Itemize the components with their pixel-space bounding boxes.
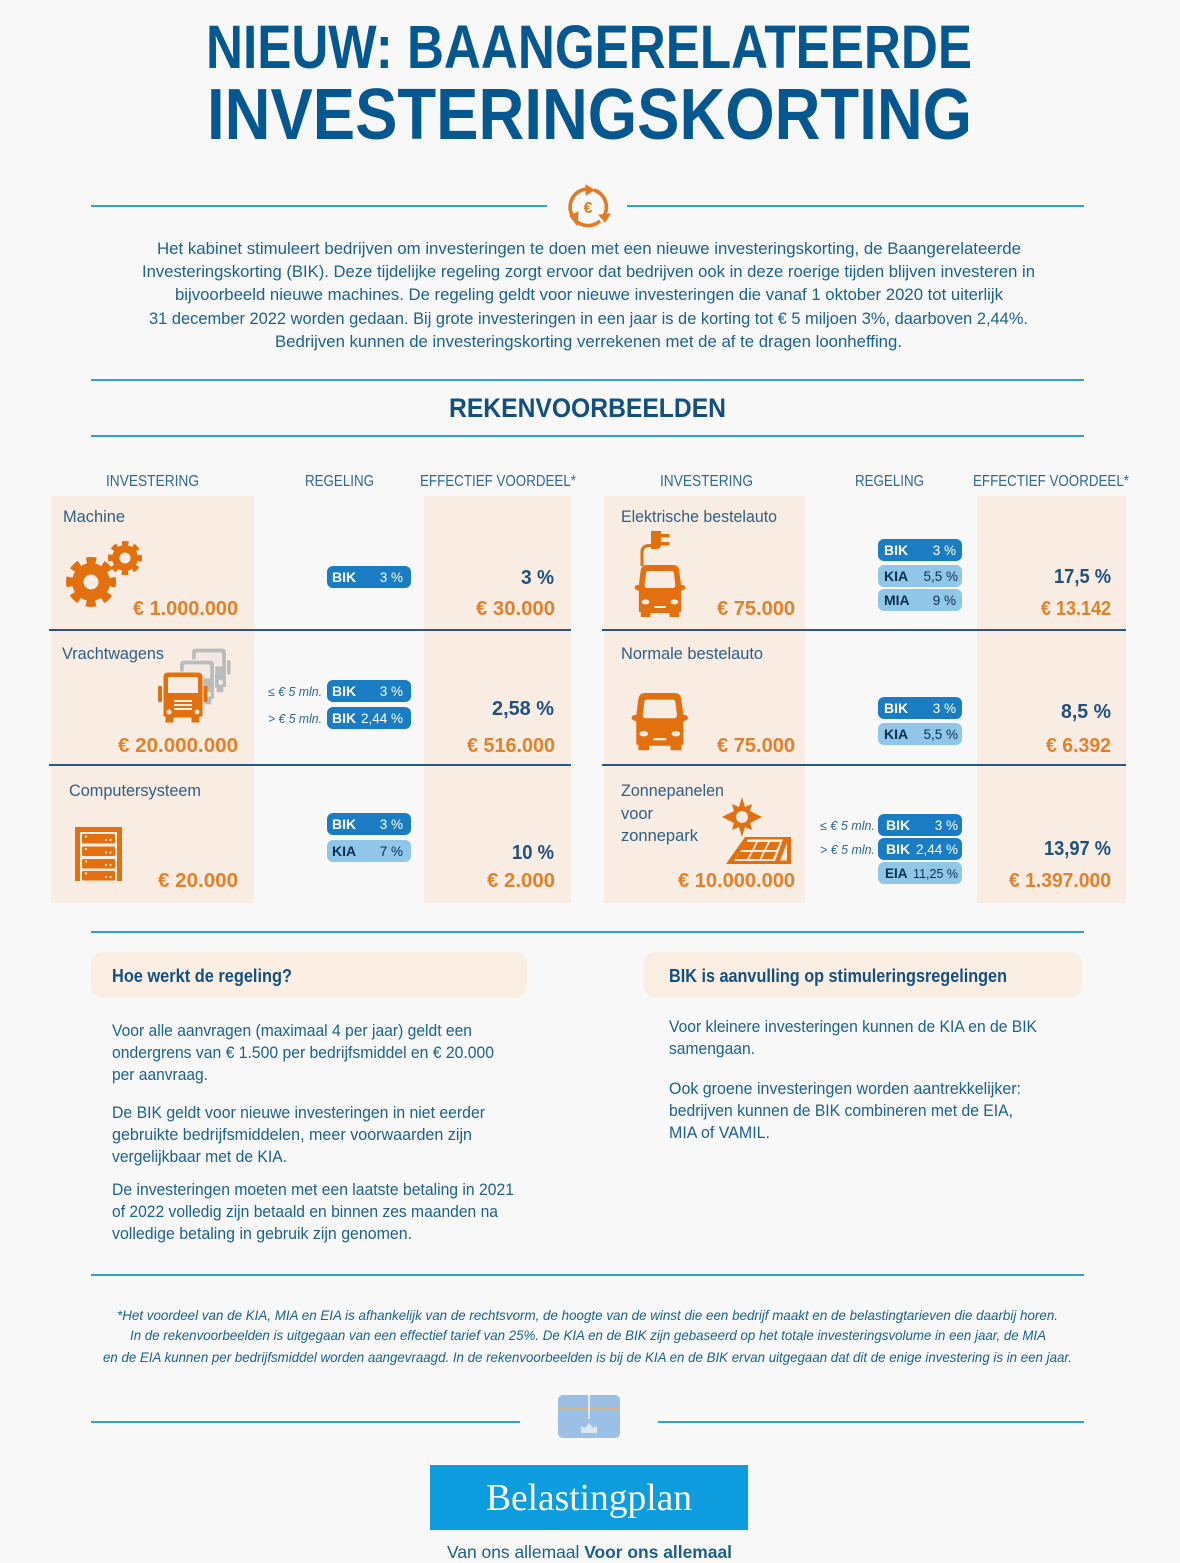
row: elektrische bestelauto: 9 %: [933, 593, 956, 608]
row: elektrische bestelauto: 5,5 %: [923, 569, 958, 584]
tagline: Van ons allemaal Voor ons allemaal: [447, 1542, 732, 1562]
title: INVESTERINGSKORTING: [207, 74, 972, 155]
row: zonnepanelen: 13,97 %: [1044, 838, 1111, 860]
footnote: en de EIA kunnen per bedrijfsmiddel worden aangevraagd. In de rekenvoorbeelden is bij de KIA en de BIK ervan uitgegaan dat dit de enige investering is in een jaar.: [103, 1349, 1072, 1365]
row: elektrische bestelauto: € 75.000: [717, 598, 795, 620]
row: vrachtwagens: € 516.000: [467, 735, 555, 757]
row: normale bestelauto: € 75.000: [717, 735, 795, 757]
row: computersysteem: 10 %: [512, 842, 554, 864]
row: computersysteem: Computersysteem: [69, 782, 201, 800]
row: zonnepanelen: EIA: [885, 866, 908, 881]
row: vrachtwagens: BIK: [332, 683, 356, 699]
row: vrachtwagens: 3 %: [380, 684, 403, 699]
row: vrachtwagens: ≤ € 5 mln.: [268, 685, 322, 699]
panel: hoe werkt de regeling: vergelijkbaar met de KIA.: [112, 1147, 287, 1166]
panel: hoe werkt de regeling: Voor alle aanvragen (maximaal 4 per jaar) geldt een: [112, 1021, 472, 1040]
row: elektrische bestelauto: Elektrische bestelauto: [621, 508, 777, 526]
row: zonnepanelen: [621, 782, 1111, 892]
intro paragraph: [142, 239, 1035, 351]
panel: bik is aanvulling: [644, 952, 1082, 1142]
row: normale bestelauto: 5,5 %: [923, 727, 958, 742]
row: computersysteem: 7 %: [380, 844, 403, 859]
title: [206, 13, 972, 155]
table column backgrounds: [51, 496, 1126, 903]
row: vrachtwagens: BIK: [332, 710, 356, 726]
icon: van: [632, 693, 688, 750]
row: normale bestelauto: BIK: [884, 700, 908, 716]
row: normale bestelauto: [621, 645, 1111, 757]
row: zonnepanelen: € 1.397.000: [1009, 870, 1111, 892]
row: machine: [63, 508, 555, 620]
intro paragraph: 31 december 2022 worden gedaan. Bij grote investeringen in een jaar is de korting tot € 5 miljoen 3%, daarboven 2,44%.: [149, 309, 1028, 328]
row: zonnepanelen: ≤ € 5 mln.: [820, 819, 875, 833]
intro paragraph: Het kabinet stimuleert bedrijven om investeringen te doen met een nieuwe investeringskorting, de Baangerelateerde: [157, 239, 1021, 258]
table column headers: REGELING: [305, 473, 374, 490]
row: elektrische bestelauto: 3 %: [933, 543, 956, 558]
row: machine: € 1.000.000: [133, 598, 238, 620]
intro paragraph: Investeringskorting (BIK). Deze tijdelijke regeling zorgt ervoor dat bedrijven ook in deze roerige tijden blijven investeren in: [142, 262, 1035, 281]
table column headers: REGELING: [855, 473, 924, 490]
row: computersysteem: BIK: [332, 816, 356, 832]
panel: hoe werkt de regeling: De BIK geldt voor nieuwe investeringen in niet eerder: [112, 1103, 485, 1122]
logo box: belastingplan: Belastingplan: [486, 1477, 692, 1519]
panel: bik is aanvulling: BIK is aanvulling op stimuleringsregelingen: [669, 966, 1007, 986]
row: elektrische bestelauto: € 13.142: [1041, 598, 1111, 620]
panel: hoe werkt de regeling: volledige betaling in gebruik zijn genomen.: [112, 1224, 412, 1243]
row: vrachtwagens: > € 5 mln.: [268, 712, 322, 726]
icon: electric van with plug: [635, 531, 685, 617]
row: vrachtwagens: 2,44 %: [361, 711, 403, 726]
row: computersysteem: [69, 782, 555, 892]
panel: hoe werkt de regeling: [91, 952, 527, 1243]
footnote: [103, 1307, 1072, 1365]
icon: server rack: [75, 827, 122, 881]
panel: bik is aanvulling: samengaan.: [669, 1039, 755, 1058]
row: elektrische bestelauto: BIK: [884, 542, 908, 558]
row: normale bestelauto: 8,5 %: [1061, 701, 1111, 723]
intro paragraph: Bedrijven kunnen de investeringskorting verrekenen met de af te dragen loonheffing.: [275, 332, 902, 351]
panel: hoe werkt de regeling: per aanvraag.: [112, 1065, 208, 1084]
heading: rekenvoorbeelden: REKENVOORBEELDEN: [449, 393, 726, 423]
row: elektrische bestelauto: 17,5 %: [1054, 566, 1111, 588]
panel: hoe werkt de regeling: De investeringen moeten met een laatste betaling in 2021: [112, 1180, 514, 1199]
table column headers: INVESTERING: [660, 473, 753, 490]
row: zonnepanelen: Zonnepanelen: [621, 782, 724, 800]
footnote: In de rekenvoorbeelden is uitgegaan van een effectief tarief van 25%. De KIA en de BIK zijn gebaseerd op het totale investeringsvolume in een jaar, de MIA: [130, 1327, 1046, 1343]
row: normale bestelauto: KIA: [884, 726, 908, 742]
row: normale bestelauto: € 6.392: [1046, 735, 1111, 757]
row: elektrische bestelauto: [621, 508, 1111, 620]
row: computersysteem: 3 %: [380, 817, 403, 832]
row: zonnepanelen: BIK: [886, 817, 910, 833]
row: normale bestelauto: Normale bestelauto: [621, 645, 763, 663]
panel: bik is aanvulling: Ook groene investeringen worden aantrekkelijker:: [669, 1079, 1021, 1098]
panel: hoe werkt de regeling: ondergrens van € 1.500 per bedrijfsmiddel en € 20.000: [112, 1043, 494, 1062]
panel: bik is aanvulling: bedrijven kunnen de BIK combineren met de EIA,: [669, 1101, 1013, 1120]
row: elektrische bestelauto: KIA: [884, 568, 908, 584]
row: vrachtwagens: [62, 645, 555, 757]
row: zonnepanelen: € 10.000.000: [678, 870, 795, 892]
row: zonnepanelen: voor: [621, 805, 653, 823]
table column headers: EFFECTIEF VOORDEEL*: [973, 473, 1129, 490]
row: normale bestelauto: 3 %: [933, 701, 956, 716]
table column headers: INVESTERING: [106, 473, 199, 490]
row: machine: BIK: [332, 569, 356, 585]
row: zonnepanelen: BIK: [886, 841, 910, 857]
table column headers: [106, 473, 1129, 490]
row: machine: Machine: [63, 508, 125, 526]
row: vrachtwagens: 2,58 %: [492, 698, 554, 720]
footnote: *Het voordeel van de KIA, MIA en EIA is afhankelijk van de rechtsvorm, de hoogte van de winst die een bedrijf maakt en de belastingtarieven die daarbij horen.: [117, 1307, 1058, 1323]
title: NIEUW: BAANGERELATEERDE: [206, 13, 972, 81]
icon: euro recycling arrows: €: [584, 200, 593, 217]
intro paragraph: bijvoorbeeld nieuwe machines. De regeling geldt voor nieuwe investeringen die vanaf 1 oktober 2020 tot uiterlijk: [175, 285, 1003, 304]
icon: euro recycling arrows: [570, 185, 610, 226]
row: elektrische bestelauto: MIA: [884, 592, 910, 608]
row: computersysteem: € 20.000: [158, 870, 238, 892]
panel: hoe werkt de regeling: gebruikte bedrijfsmiddelen, meer voorwaarden zijn: [112, 1125, 472, 1144]
row: zonnepanelen: 2,44 %: [916, 842, 958, 857]
icon: sun and solar panel: [722, 797, 791, 864]
icon: government logo: [558, 1395, 620, 1438]
row: zonnepanelen: 3 %: [935, 818, 958, 833]
panel: bik is aanvulling: Voor kleinere investeringen kunnen de KIA en de BIK: [669, 1017, 1038, 1036]
table column headers: EFFECTIEF VOORDEEL*: [420, 473, 576, 490]
logo box: belastingplan: [430, 1465, 748, 1530]
row: vrachtwagens: € 20.000.000: [118, 735, 238, 757]
icon: trucks: [158, 648, 231, 723]
row: zonnepanelen: > € 5 mln.: [820, 843, 875, 857]
row: computersysteem: KIA: [332, 843, 356, 859]
row: machine: € 30.000: [476, 598, 555, 620]
panel: bik is aanvulling: MIA of VAMIL.: [669, 1123, 770, 1142]
row: vrachtwagens: Vrachtwagens: [62, 645, 164, 663]
panel: hoe werkt de regeling: of 2022 volledig zijn betaald en binnen zes maanden na: [112, 1202, 498, 1221]
row: machine: 3 %: [380, 570, 403, 585]
panel: hoe werkt de regeling: Hoe werkt de regeling?: [112, 966, 292, 986]
row: zonnepanelen: zonnepark: [621, 827, 699, 845]
row: machine: 3 %: [521, 567, 554, 589]
row: zonnepanelen: 11,25 %: [913, 867, 958, 881]
row: computersysteem: € 2.000: [487, 870, 555, 892]
icon: gears: [70, 544, 140, 604]
